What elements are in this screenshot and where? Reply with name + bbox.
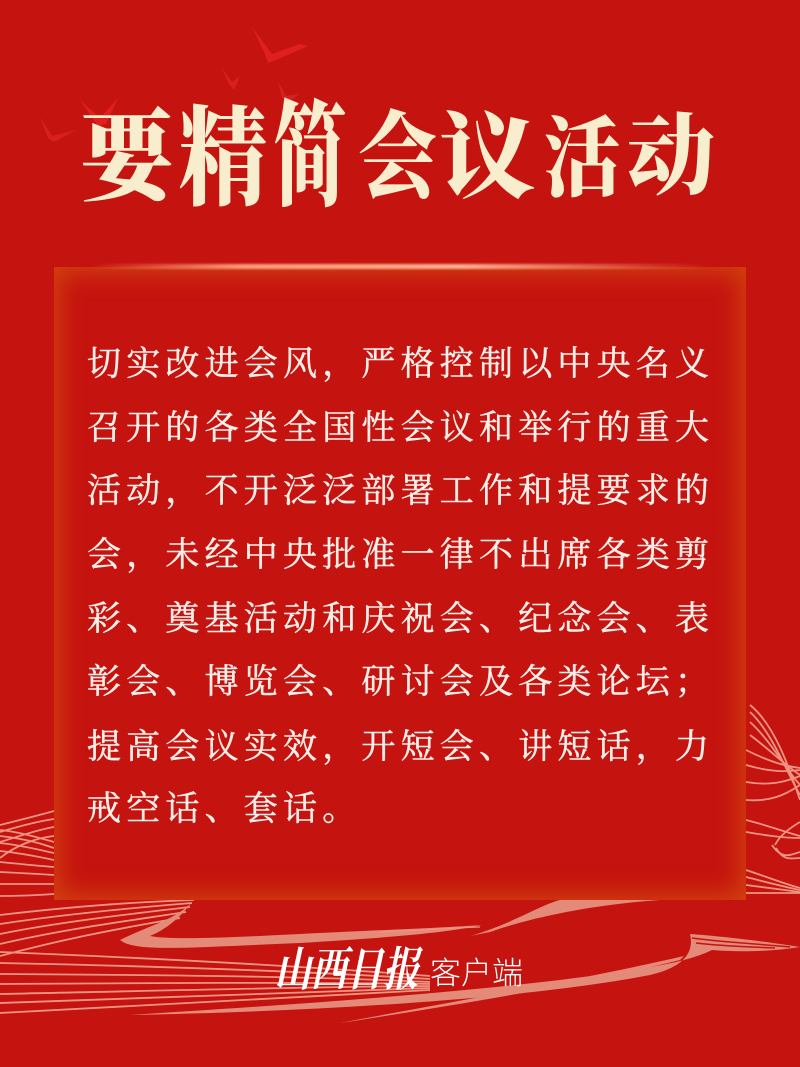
body text block: 切实改进会风，严格控制以中央名义 <box>87 346 714 383</box>
icon: bird near title <box>80 98 118 126</box>
title: 动 <box>627 107 715 206</box>
icon: far left bird <box>40 117 76 142</box>
title: 活 <box>544 111 620 208</box>
ribbon: left lower fan and tip <box>0 900 482 956</box>
body text block <box>87 346 714 828</box>
title <box>80 94 715 221</box>
ribbon: right lower band <box>746 870 800 893</box>
body text block: 彰会、博览会、研讨会及各类论坛； <box>87 664 714 701</box>
ribbon: center rising band <box>380 900 660 936</box>
title: 要 <box>80 101 179 214</box>
body text block: 召开的各类全国性会议和举行的重大 <box>87 410 714 447</box>
ribbon: lower sweeping band with right tip <box>130 934 800 1023</box>
title: 精 <box>179 98 267 219</box>
body text block: 提高会议实效，开短会、讲短话，力 <box>87 729 714 766</box>
logo calligraphy name: 山西日报 <box>272 944 428 996</box>
title: 议 <box>438 105 536 211</box>
panel: main text card <box>54 267 746 900</box>
icon: small bird <box>221 67 240 90</box>
logo suffix text: 客户端 <box>430 956 523 991</box>
ribbon: long left to right lines <box>0 952 430 1013</box>
title: 简 <box>273 94 347 221</box>
title: 会 <box>358 104 438 211</box>
body text block: 彩、奠基活动和庆祝会、纪念会、表 <box>87 601 714 638</box>
body text block: 戒空话、套话。 <box>87 791 361 828</box>
ribbon: right upper fan <box>746 705 800 859</box>
ribbon: left upper fan <box>0 811 54 896</box>
logo: newspaper client <box>272 944 523 996</box>
panel top glow <box>90 264 710 269</box>
icon: large top bird <box>252 27 308 63</box>
icon: small right bird <box>278 81 300 102</box>
body text block: 会，未经中央批准一律不出席各类剪 <box>87 537 714 574</box>
body text block: 活动，不开泛泛部署工作和提要求的 <box>87 473 714 510</box>
